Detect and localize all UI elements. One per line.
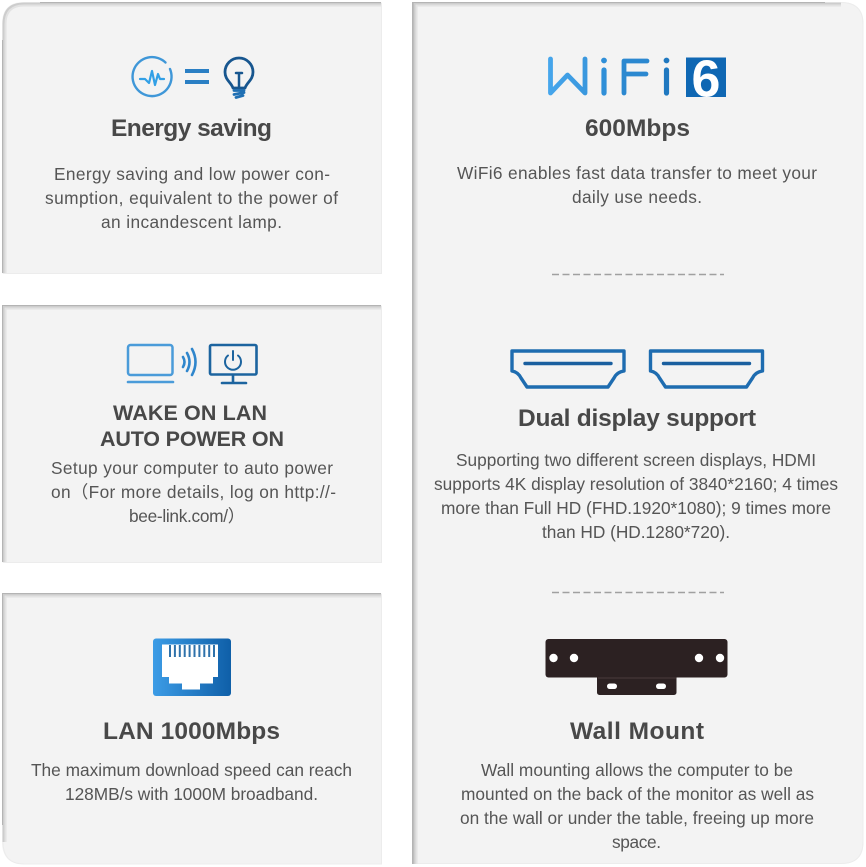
panel: right features	[412, 2, 864, 864]
text: dual display description	[434, 450, 838, 542]
heading: wake on lan auto power on: AUTO POWER ON	[100, 427, 284, 451]
text: wall mount description: Wall mounting allows the computer to be	[481, 760, 793, 780]
heading: wake on lan auto power on: WAKE ON LAN	[113, 401, 267, 425]
heading: dual display support: Dual display support	[518, 405, 756, 432]
panel: energy saving	[2, 2, 382, 274]
text: energy saving description: sumption, equivalent to the power of	[45, 188, 338, 208]
text: lan description	[31, 760, 352, 804]
text: dual display description: supports 4K display resolution of 3840*2160; 4 times	[434, 474, 838, 494]
heading: 600mbps: 600Mbps	[585, 115, 690, 142]
text: energy saving description	[45, 164, 338, 232]
icon: energy meter equals light bulb	[133, 57, 253, 98]
icon: wifi 6 logo	[550, 50, 726, 108]
text: wake on lan description: bee-link.com/）	[129, 506, 245, 526]
text: wake on lan description: on（For more details, log on http://-	[51, 482, 336, 502]
text: dual display description: more than Full HD (FHD.1920*1080); 9 times more	[441, 498, 831, 518]
text: wifi description: WiFi6 enables fast data transfer to meet your	[457, 163, 817, 183]
heading: wall mount: Wall Mount	[570, 718, 704, 745]
text: wall mount description: space.	[612, 832, 661, 852]
icon: wall mount bracket	[546, 639, 728, 695]
icon: two hdmi ports	[512, 351, 762, 387]
text: wall mount description: on the wall or under the table, freeing up more	[460, 808, 814, 828]
text: wifi description: daily use needs.	[572, 187, 702, 207]
text: dual display description: than HD (HD.1280*720).	[542, 522, 730, 542]
text: dual display description: Supporting two different screen displays, HDMI	[456, 450, 816, 470]
text: energy saving description: an incandescent lamp.	[101, 212, 282, 232]
panel: lan 1000mbps	[2, 593, 382, 864]
text: wall mount description: mounted on the back of the monitor as well as	[461, 784, 814, 804]
text: wall mount description	[460, 760, 814, 852]
heading: lan 1000mbps: LAN 1000Mbps	[103, 718, 280, 745]
text: wake on lan description	[51, 458, 336, 526]
text: lan description: 128MB/s with 1000M broadband.	[65, 784, 318, 804]
panel: wake on lan	[2, 305, 382, 562]
icon: ethernet port	[153, 638, 231, 696]
icon: wifi 6 logo: 6	[692, 50, 720, 108]
text: lan description: The maximum download speed can reach	[31, 760, 352, 780]
heading: energy saving: Energy saving	[111, 115, 272, 142]
heading: wake on lan auto power on	[100, 401, 284, 451]
text: energy saving description: Energy saving and low power con-	[54, 164, 330, 184]
text: wake on lan description: Setup your computer to auto power	[51, 458, 333, 478]
text: wifi description	[457, 163, 817, 207]
icon: laptop signal monitor power	[128, 345, 256, 383]
